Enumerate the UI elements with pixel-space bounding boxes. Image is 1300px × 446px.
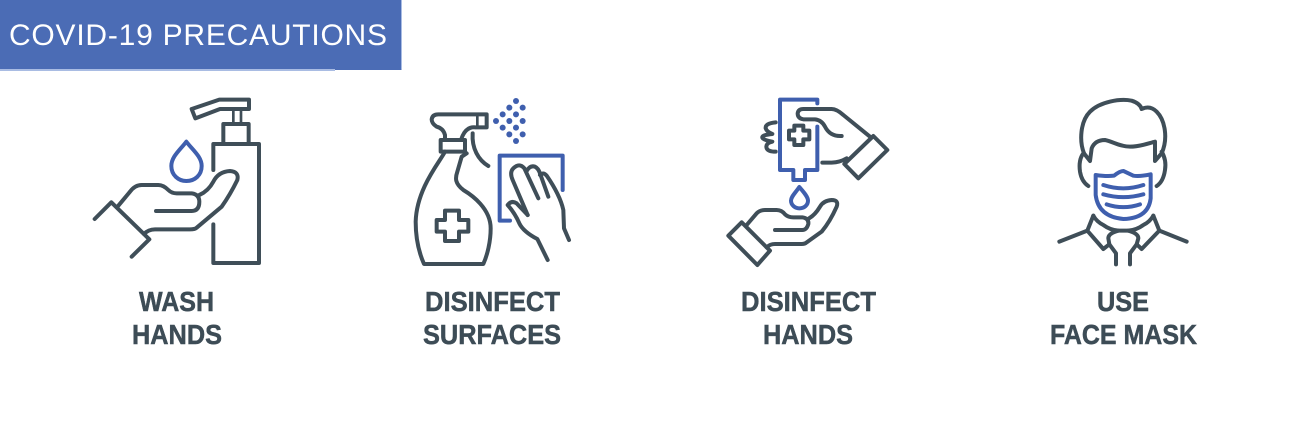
- label: disinfect: DISINFECT: [741, 286, 876, 317]
- label: wash hands: WASH: [139, 286, 214, 317]
- title banner: COVID-19 PRECAUTIONS: [9, 19, 387, 52]
- icon: disinfect hands: [728, 100, 887, 265]
- icon: disinfect surfaces: [416, 98, 569, 264]
- icon: wash hands: [95, 100, 259, 263]
- label: disinfect: DISINFECT: [425, 286, 560, 317]
- label: hands: HANDS: [763, 319, 853, 350]
- label: surfaces: SURFACES: [423, 319, 561, 350]
- title banner: [0, 0, 402, 71]
- label: hands: HANDS: [132, 319, 222, 350]
- label: use: USE: [1097, 286, 1149, 317]
- icon: face mask: [1059, 100, 1187, 264]
- label: face mask: FACE MASK: [1050, 319, 1197, 350]
